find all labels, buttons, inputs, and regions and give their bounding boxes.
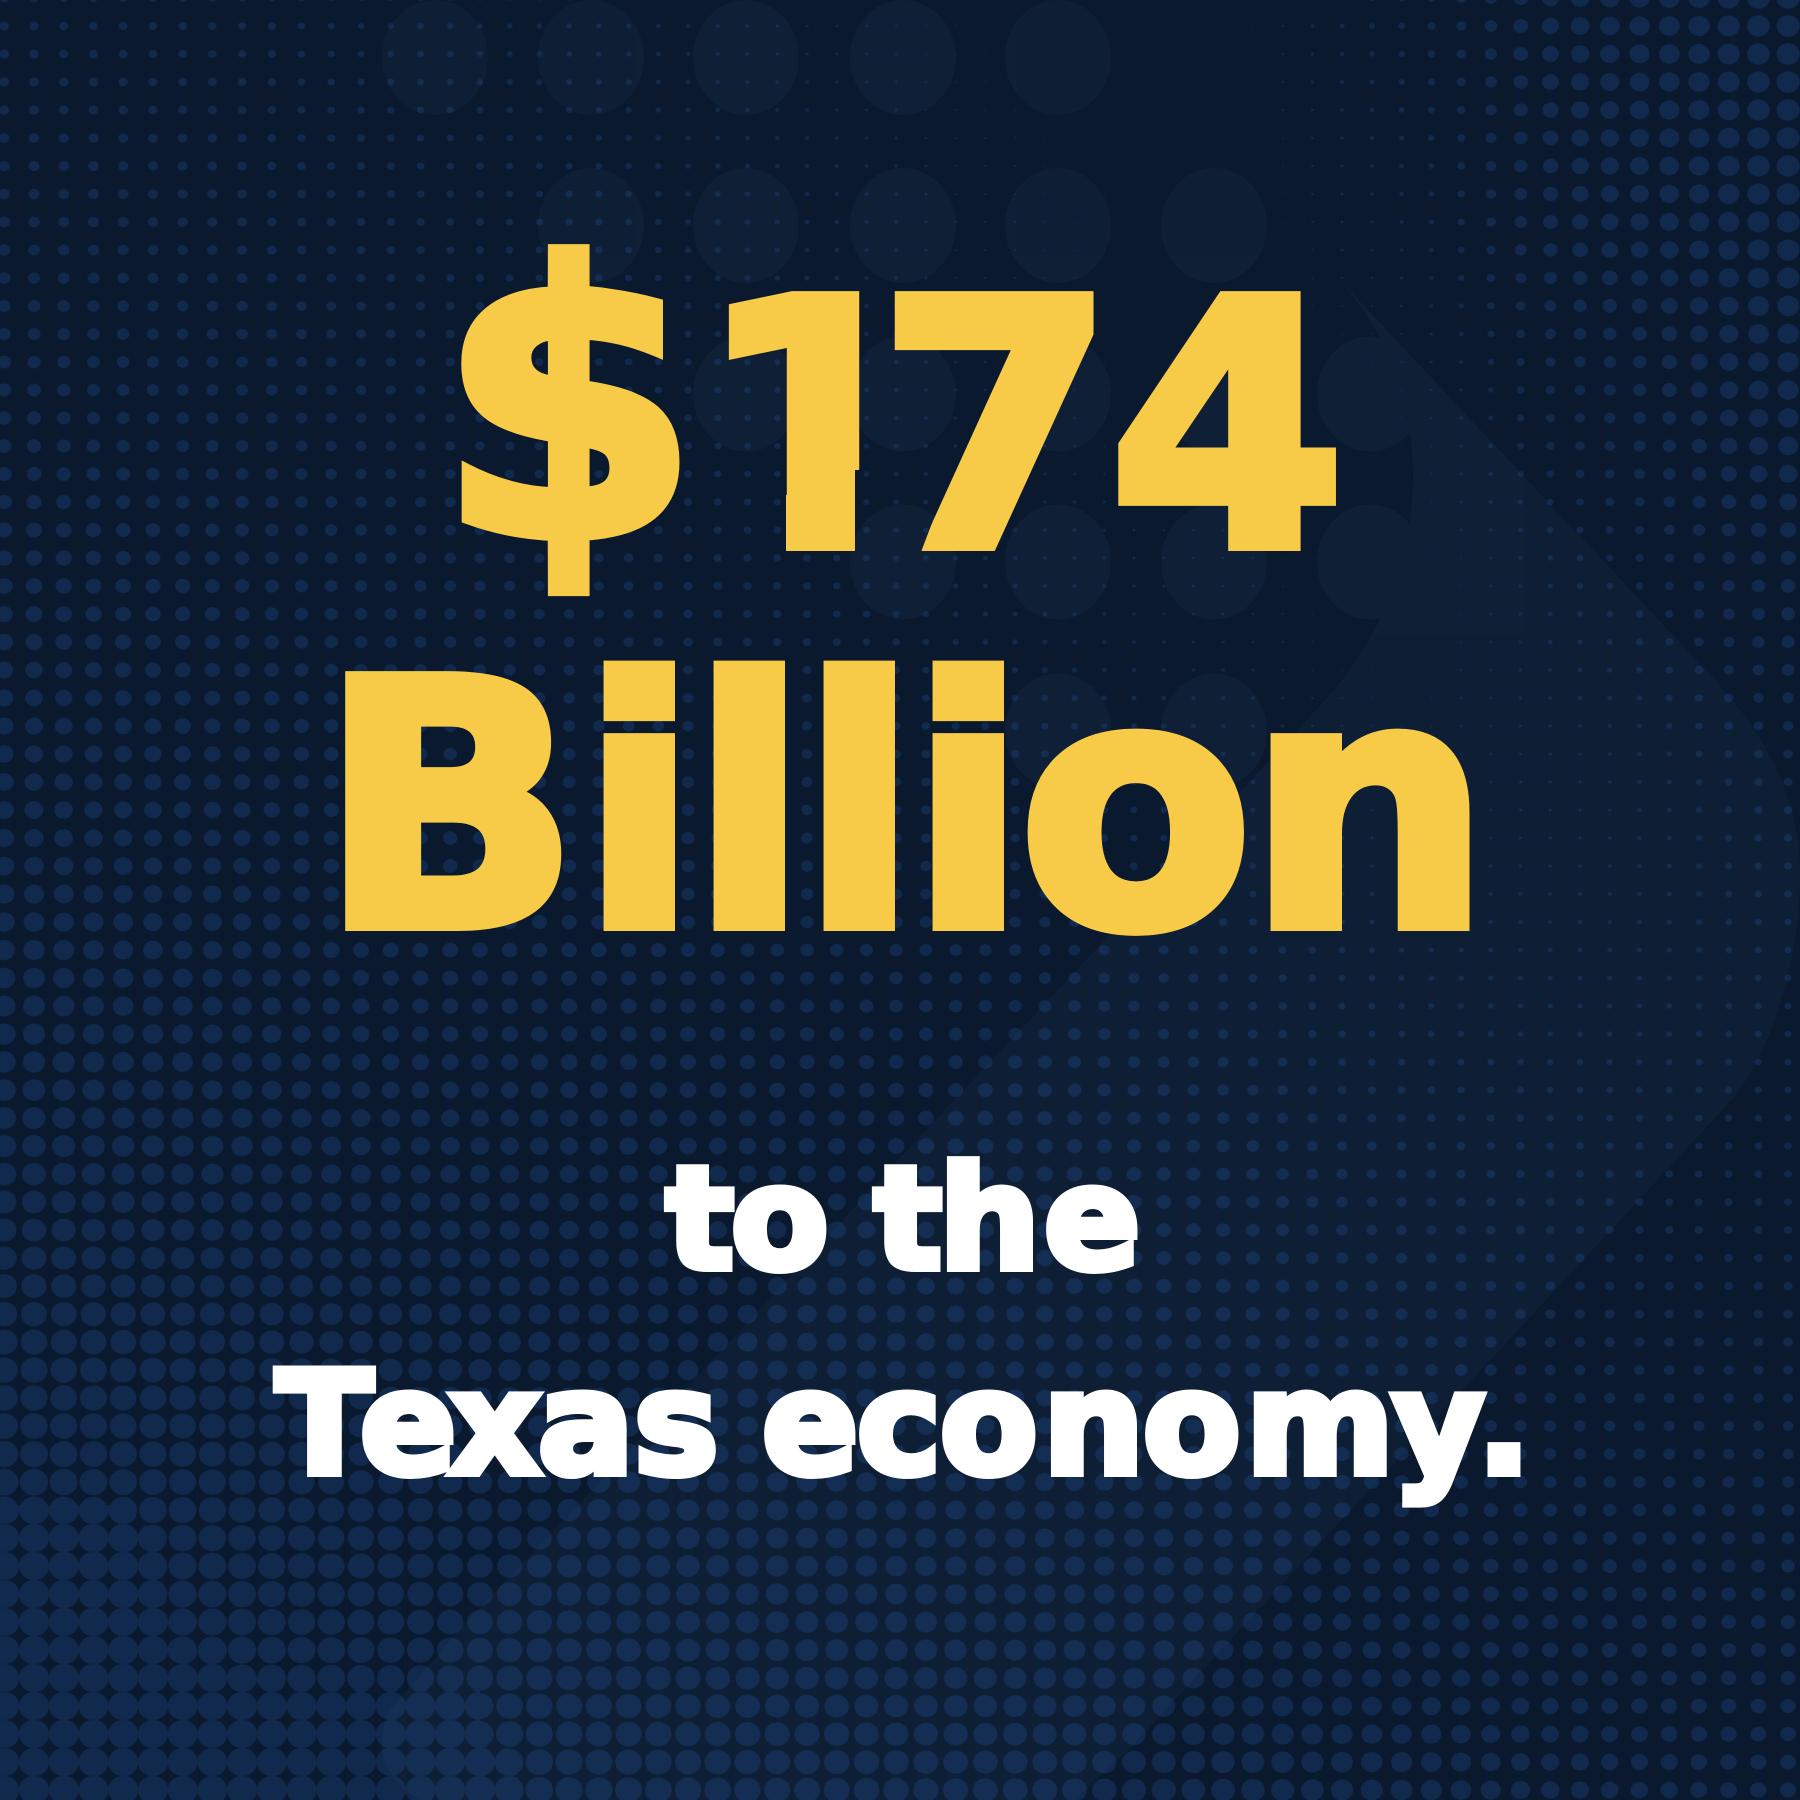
amount: $174: $174	[438, 188, 1346, 626]
background: translucent swoosh and circle overlay	[382, 0, 1800, 1800]
unit: Billion: Billion	[320, 610, 1490, 1006]
text line: Texas economy.: Texas economy.	[276, 1342, 1531, 1507]
heading: $174 Billion	[345, 244, 1470, 936]
text line: to the: to the	[666, 1137, 1140, 1302]
subheading: to the Texas economy.	[276, 1137, 1531, 1507]
